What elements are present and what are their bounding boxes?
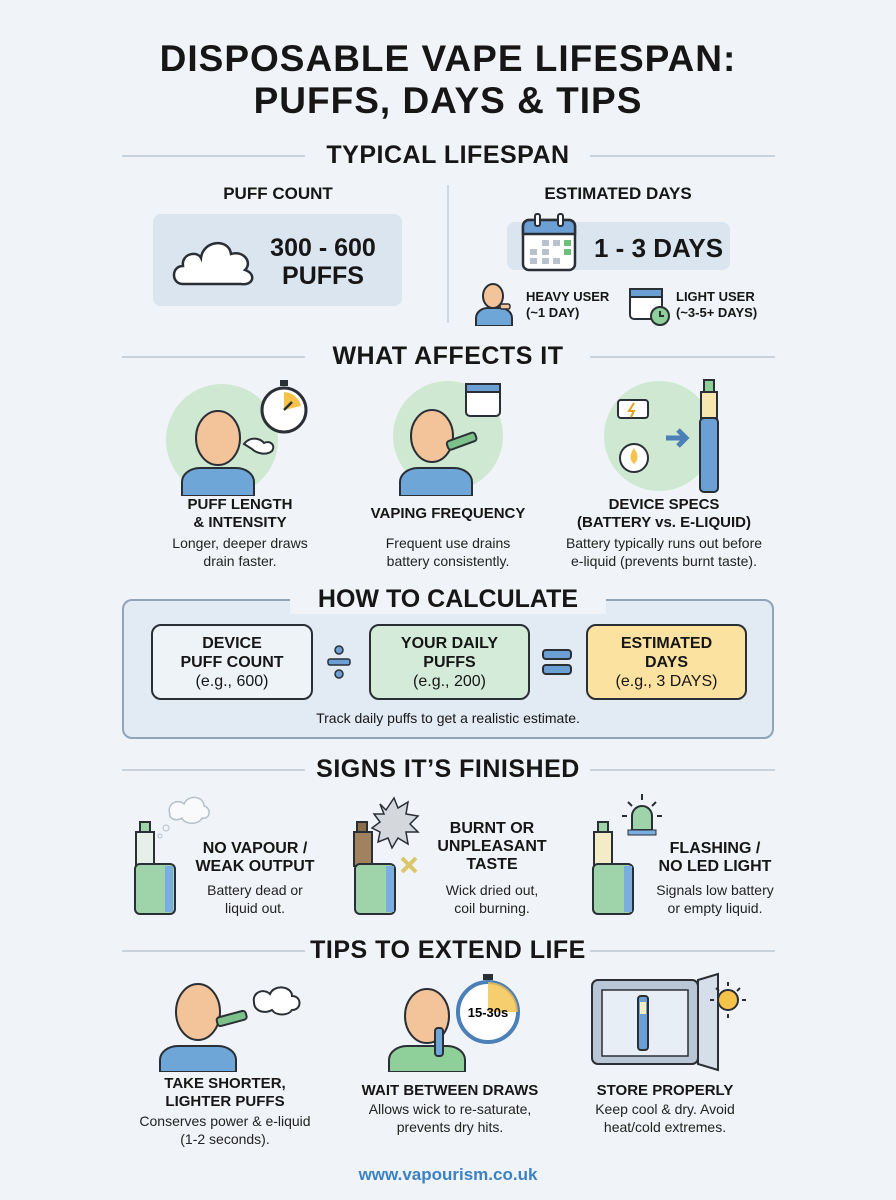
panel: no vapour — [134, 796, 315, 916]
text: flashing desc: or empty liquid. — [668, 900, 762, 916]
text: no vapour desc: liquid out. — [225, 900, 285, 916]
text: device specs title: DEVICE SPECS — [609, 496, 719, 513]
box: device puff count — [151, 624, 313, 700]
box: estimated days: DAYS — [645, 654, 688, 671]
text: flashing title: FLASHING / — [670, 840, 760, 857]
text: burnt title — [437, 820, 547, 873]
icon: person with timer: 15-30s — [468, 1005, 508, 1020]
text: light user: (~3-5+ DAYS) — [676, 305, 757, 320]
box: your daily puffs — [369, 624, 530, 700]
text: no vapour title — [195, 840, 315, 875]
text: flashing title — [659, 840, 772, 875]
text: light user: LIGHT USER — [676, 289, 755, 304]
panel: how to calculate — [122, 599, 774, 739]
icon: vape with LED — [592, 794, 662, 915]
text: store title: STORE PROPERLY — [597, 1082, 733, 1099]
title — [160, 38, 736, 121]
heading: tips to extend life: TIPS TO EXTEND LIFE — [310, 936, 586, 964]
icon: person puffing — [159, 983, 300, 1072]
panel: vaping frequency — [370, 381, 526, 569]
text: burnt desc: Wick dried out, — [446, 882, 538, 898]
text: wait desc — [335, 1100, 565, 1136]
text: no vapour desc: Battery dead or — [207, 882, 303, 898]
box: estimated days: ESTIMATED — [621, 635, 712, 652]
icon: cloud — [172, 242, 254, 286]
box: device puff count: DEVICE — [202, 635, 262, 652]
panel: estimated days — [475, 184, 757, 326]
panel: wait between draws — [362, 974, 538, 1135]
title: PUFFS, DAYS & TIPS — [254, 80, 642, 121]
text: shorter puffs desc: (1-2 seconds). — [180, 1131, 270, 1147]
box: device puff count: (e.g., 600) — [196, 673, 268, 690]
puff count box — [153, 214, 402, 306]
icon: heavy user — [475, 283, 513, 326]
text: frequency desc: Frequent use drains — [386, 535, 510, 551]
icon: cabinet with sun — [588, 972, 748, 1072]
heading: what affects it: WHAT AFFECTS IT — [332, 342, 564, 370]
text: shorter puffs title: TAKE SHORTER, — [164, 1075, 286, 1092]
text: 300-600 puffs — [270, 234, 376, 290]
text: wait desc: Allows wick to re-saturate, — [369, 1101, 531, 1117]
text: flashing desc: Signals low battery — [656, 882, 774, 898]
text: flashing desc — [656, 882, 774, 916]
text: puff length desc — [172, 535, 308, 569]
text: frequency desc — [386, 535, 510, 569]
title: DISPOSABLE VAPE LIFESPAN: — [160, 38, 736, 79]
text: shorter puffs title — [164, 1075, 286, 1110]
text: frequency desc: battery consistently. — [387, 553, 509, 569]
subheading: puff count: PUFF COUNT — [223, 184, 333, 203]
text: store desc: heat/cold extremes. — [604, 1119, 726, 1135]
text: 1-3 days: 1 - 3 DAYS — [594, 233, 723, 263]
text: 300-600 puffs: PUFFS — [282, 262, 364, 290]
text: device specs desc — [566, 535, 762, 569]
text: device specs desc: e-liquid (prevents burnt taste). — [571, 553, 757, 569]
icon: person with timer — [385, 972, 525, 1072]
icon: divide — [327, 645, 351, 679]
icon: light user calendar — [629, 288, 670, 326]
panel: device specs — [566, 379, 762, 569]
text: wait desc: prevents dry hits. — [397, 1119, 503, 1135]
text: wait title: WAIT BETWEEN DRAWS — [362, 1082, 538, 1099]
box: estimated days: (e.g., 3 DAYS) — [616, 673, 717, 690]
footer url: www.vapourism.co.uk — [359, 1165, 537, 1184]
days box — [507, 222, 730, 270]
icon: burnt vape — [353, 796, 420, 915]
text: no vapour title: NO VAPOUR / — [203, 840, 307, 857]
icon: person exhaling with stopwatch — [166, 380, 308, 496]
heading: how to calculate: HOW TO CALCULATE — [318, 585, 578, 613]
text: device specs title: (BATTERY vs. E-LIQUID) — [577, 514, 751, 531]
panel: puff length — [166, 380, 308, 569]
box: device puff count: PUFF COUNT — [180, 654, 284, 671]
text: shorter puffs desc — [139, 1113, 311, 1147]
text: burnt title: BURNT OR — [450, 820, 534, 837]
text: puff length title — [188, 496, 292, 531]
icon: person vaping with calendar — [393, 381, 503, 496]
icon: equals — [542, 649, 572, 675]
text: shorter puffs title: LIGHTER PUFFS — [165, 1093, 285, 1110]
text: shorter puffs desc: Conserves power & e-liquid — [139, 1113, 311, 1129]
text: burnt desc — [446, 882, 538, 916]
text: store desc — [550, 1100, 780, 1136]
text: burnt title: UNPLEASANT — [437, 838, 547, 855]
text: flashing title: NO LED LIGHT — [659, 858, 771, 875]
text: puff length desc: Longer, deeper draws — [172, 535, 308, 551]
panel: burnt taste — [353, 796, 547, 916]
text: device specs desc: Battery typically runs out before — [566, 535, 762, 551]
box: your daily puffs: PUFFS — [423, 654, 476, 671]
panel: shorter puffs — [139, 983, 311, 1147]
text: burnt title: TASTE — [466, 856, 518, 873]
text: 300-600 puffs: 300 - 600 — [270, 234, 376, 262]
icon: calendar — [522, 213, 576, 272]
text: puff length title: PUFF LENGTH — [188, 496, 292, 513]
panel: puff count — [153, 184, 402, 306]
text: heavy user: (~1 DAY) — [526, 305, 579, 320]
text: light user — [676, 289, 757, 320]
text: footnote: Track daily puffs to get a realistic estimate. — [316, 710, 580, 726]
text: no vapour title: WEAK OUTPUT — [195, 858, 315, 875]
text: frequency title: VAPING FREQUENCY — [371, 505, 525, 522]
text: puff length title: & INTENSITY — [193, 514, 287, 531]
box: your daily puffs: (e.g., 200) — [413, 673, 486, 690]
box: your daily puffs: YOUR DAILY — [401, 635, 498, 652]
panel: store properly — [560, 972, 770, 1132]
icon: vape with empty cloud — [134, 796, 210, 915]
text: device specs title — [577, 496, 751, 531]
heading: signs it's finished: SIGNS IT’S FINISHED — [316, 755, 580, 783]
text: heavy user: HEAVY USER — [526, 289, 609, 304]
text: no vapour desc — [207, 882, 303, 916]
subheading: estimated days: ESTIMATED DAYS — [544, 184, 692, 203]
text: puff length desc: drain faster. — [203, 553, 277, 569]
text: burnt desc: coil burning. — [454, 900, 530, 916]
text: heavy user — [526, 289, 609, 320]
text: store desc: Keep cool & dry. Avoid — [595, 1101, 735, 1117]
heading: typical lifespan: TYPICAL LIFESPAN — [326, 141, 570, 169]
box: estimated days — [586, 624, 747, 700]
panel: flashing led — [592, 794, 774, 916]
icon: battery liquid device — [604, 379, 719, 493]
